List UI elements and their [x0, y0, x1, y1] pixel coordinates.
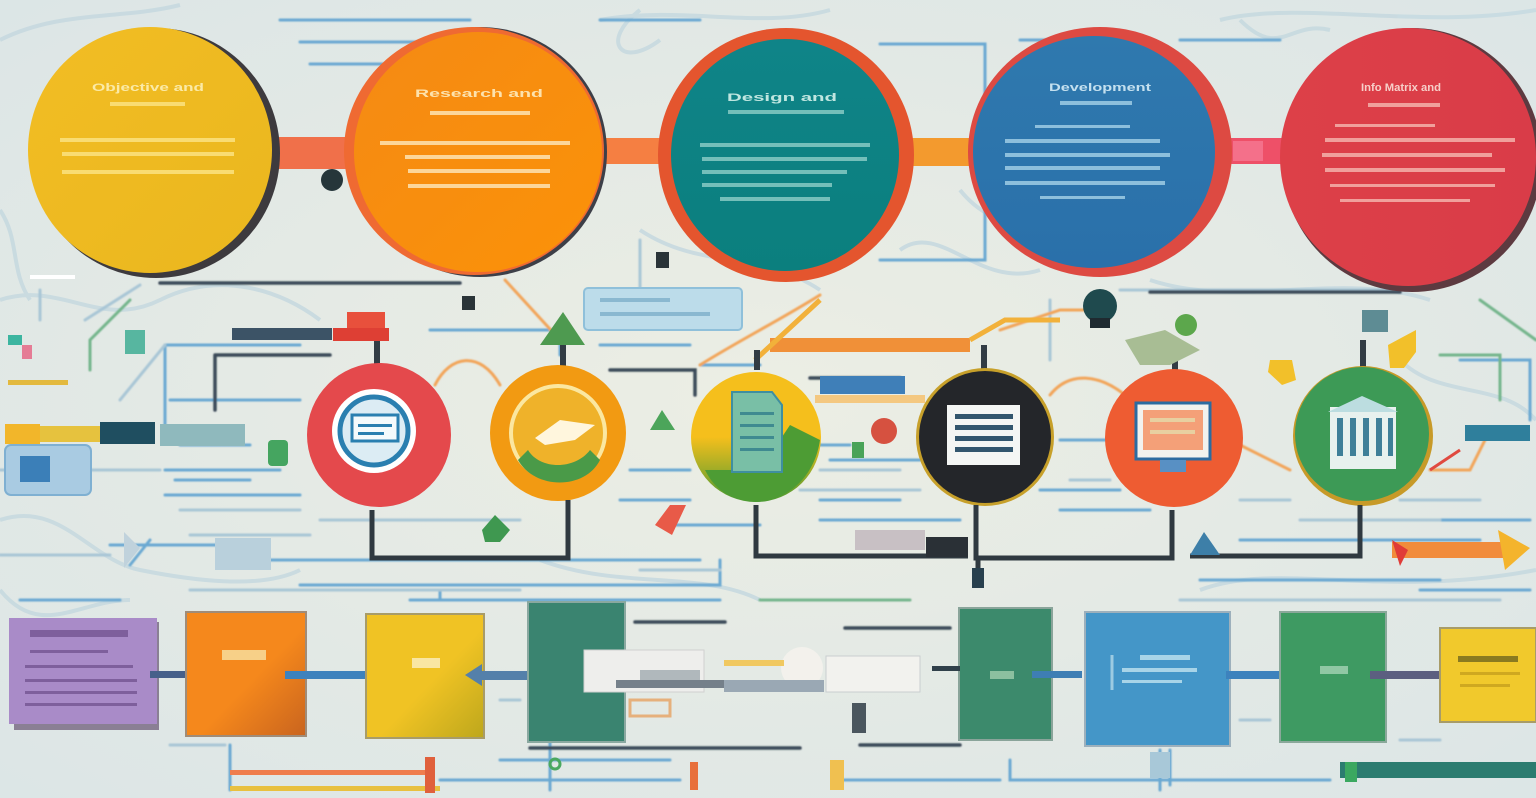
arrow: purple to orange	[150, 664, 205, 686]
panel: orange circle	[344, 27, 607, 277]
arrow: red to orange	[1392, 530, 1530, 570]
panel: yellow circle	[28, 27, 280, 278]
panel: red circle	[1280, 28, 1536, 292]
text block: yellow circle	[60, 102, 235, 174]
panel: green box 2	[1280, 612, 1386, 742]
icon circle: orange monitor	[1105, 369, 1243, 507]
orange arrow band mid	[755, 300, 1060, 403]
heading: teal circle: Design and	[727, 92, 837, 104]
icon: small dark markers	[462, 252, 669, 310]
small labels on tree row	[124, 530, 1220, 570]
heading: yellow circle: Objective and	[92, 82, 204, 94]
arrow: orange to yellow	[285, 665, 382, 685]
icon circle: red chat	[307, 363, 451, 507]
bottom connector strips	[230, 425, 1536, 793]
callout: pale blue label	[584, 288, 742, 330]
icon circle: yellow document	[691, 372, 821, 502]
panel: yellow box right	[1440, 628, 1536, 722]
panel: yellow box	[366, 614, 484, 738]
panel: green box 1	[959, 608, 1052, 740]
arrow: blue double	[465, 664, 538, 686]
stems to mid circles	[374, 340, 1366, 375]
panel: blue box	[1085, 612, 1230, 746]
icon: yellow arrows	[1268, 310, 1416, 385]
icon circle: dark list	[916, 368, 1054, 506]
text block: teal circle	[700, 110, 870, 201]
panel: purple box	[9, 618, 159, 730]
small green and red markers	[268, 410, 897, 542]
arrow: blue to green	[1226, 671, 1290, 679]
heading: red circle: Info Matrix and	[1361, 82, 1441, 94]
text block: blue circle	[1005, 101, 1170, 199]
icon circle: green building	[1293, 366, 1433, 506]
text block: orange circle	[380, 111, 570, 188]
panel: teal circle	[658, 28, 914, 282]
panel: teal green box	[528, 602, 625, 742]
panel: central white labels	[584, 647, 920, 733]
panel: blue circle	[968, 27, 1232, 277]
top row connectors	[270, 137, 1290, 191]
icon: red pin	[232, 312, 389, 341]
tree connectors from circles	[372, 500, 1360, 585]
arrow: green to yellow	[1370, 671, 1454, 679]
heading: orange circle: Research and	[415, 88, 543, 100]
icon: green house marker	[540, 312, 585, 345]
small left panel: status cluster	[5, 275, 245, 495]
icon: green and grey marker	[1125, 314, 1200, 365]
panel: orange box	[186, 612, 306, 736]
icon: dark teal node	[1083, 289, 1117, 328]
icon circle: orange handshake	[490, 365, 626, 501]
arrow: green to blue	[932, 666, 1082, 678]
heading: blue circle: Development	[1049, 82, 1151, 94]
text block: red circle	[1322, 103, 1515, 202]
